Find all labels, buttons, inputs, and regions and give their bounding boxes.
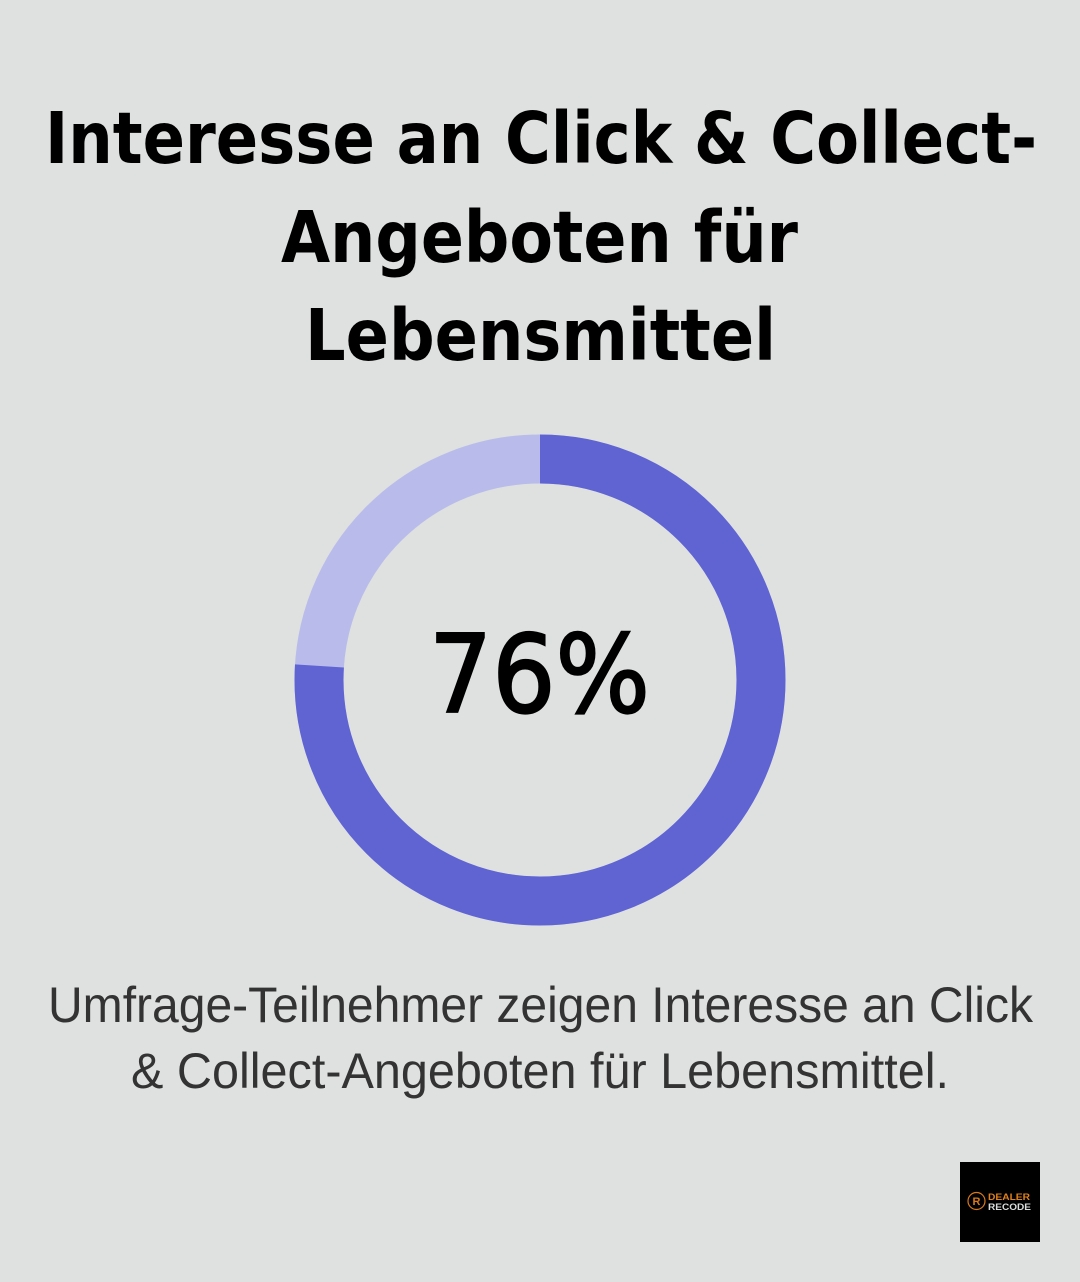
title: Angeboten für xyxy=(281,196,798,279)
logo: Dealer Recode: R xyxy=(973,1196,981,1208)
description text xyxy=(48,977,1034,1099)
logo: Dealer Recode: DEALER xyxy=(988,1192,1030,1203)
donut chart: 76% xyxy=(319,459,761,901)
logo: Dealer Recode: RECODE xyxy=(988,1202,1031,1213)
title xyxy=(45,97,1037,377)
description text: Umfrage-Teilnehmer zeigen Interesse an Click xyxy=(48,977,1034,1033)
percentage value: 76% xyxy=(429,613,650,738)
title: Lebensmittel xyxy=(305,294,776,377)
description text: & Collect-Angeboten für Lebensmittel. xyxy=(131,1043,949,1099)
logo: Dealer Recode xyxy=(960,1162,1040,1242)
